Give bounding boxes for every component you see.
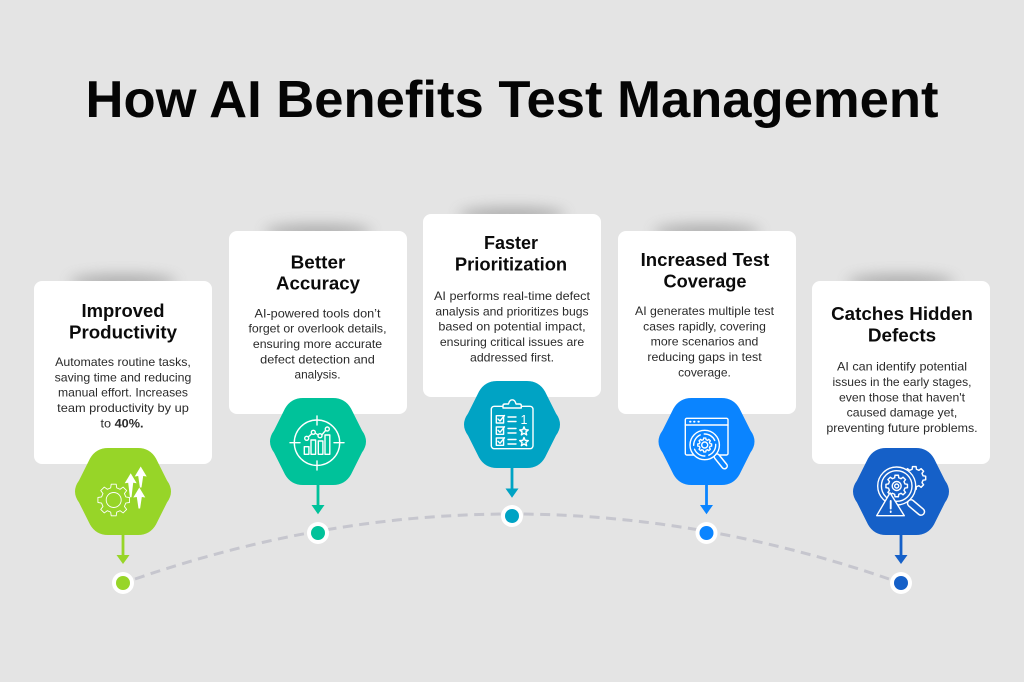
- arrow: green pointer: [116, 534, 130, 564]
- text: increased test coverage description: AI generates multiple test: [635, 305, 775, 318]
- heading: improved productivity: [69, 300, 178, 342]
- marker: cyan dot: [501, 505, 523, 527]
- hexagon: cyan: [464, 381, 560, 468]
- text: better accuracy description: defect detection and: [260, 353, 375, 366]
- text: catches hidden defects description: [826, 361, 978, 435]
- text: improved productivity description: to 40%.: [100, 417, 144, 430]
- text: improved productivity description: saving time and reducing: [55, 371, 191, 384]
- heading: faster prioritization: Prioritization: [455, 253, 567, 274]
- icon: target with bar chart: [290, 416, 344, 470]
- hexagon: blue: [658, 398, 754, 485]
- text: faster prioritization description: addressed first.: [470, 351, 554, 364]
- text: catches hidden defects description: preventing future problems.: [826, 422, 978, 435]
- heading: improved productivity: Productivity: [69, 322, 178, 342]
- heading: increased test coverage: Coverage: [664, 270, 746, 291]
- text: better accuracy description: AI-powered tools don’t: [254, 307, 381, 320]
- heading: catches hidden defects: Catches Hidden: [831, 303, 973, 324]
- icon: magnifier, gears and warning: [877, 467, 926, 516]
- text: catches hidden defects description: caused damage yet,: [847, 407, 957, 420]
- text: improved productivity description: Automates routine tasks,: [55, 356, 191, 369]
- title: How AI Benefits Test Management: [86, 71, 938, 129]
- icon: gear with up arrows: [98, 466, 147, 516]
- text: increased test coverage description: coverage.: [678, 366, 731, 379]
- heading: catches hidden defects: Defects: [868, 324, 936, 345]
- icon: clipboard checklist: [491, 400, 533, 449]
- text: increased test coverage description: reducing gaps in test: [647, 351, 762, 364]
- text: faster prioritization description: analysis and prioritizes bugs: [435, 305, 589, 318]
- text: better accuracy description: analysis.: [294, 369, 340, 382]
- marker: teal dot: [307, 522, 329, 544]
- text: faster prioritization description: based on potential impact,: [438, 321, 586, 334]
- text: increased test coverage description: [635, 305, 775, 379]
- arrow: teal pointer: [312, 484, 324, 514]
- marker: green dot: [112, 572, 134, 594]
- heading: better accuracy: [276, 251, 361, 293]
- text: faster prioritization description: [434, 290, 591, 364]
- arrow: blue pointer: [700, 484, 713, 514]
- heading: improved productivity: Improved: [82, 300, 164, 321]
- heading: better accuracy: Accuracy: [276, 272, 361, 293]
- heading: faster prioritization: [455, 232, 567, 274]
- hexagon: green: [75, 448, 171, 535]
- text: improved productivity description: [55, 356, 191, 430]
- dashed arc connector: [135, 514, 889, 579]
- text: catches hidden defects description: AI can identify potential: [837, 361, 967, 374]
- panel: increased test coverage: [618, 225, 796, 414]
- text: increased test coverage description: more scenarios and: [651, 336, 758, 349]
- panel: better accuracy: [229, 225, 407, 414]
- heading: better accuracy: Better: [291, 251, 345, 272]
- text: faster prioritization description: ensuring critical issues are: [440, 336, 584, 349]
- panel: improved productivity: [34, 275, 212, 464]
- heading: faster prioritization: Faster: [484, 232, 538, 253]
- panel: catches hidden defects: [812, 275, 990, 464]
- heading: increased test coverage: Increased Test: [641, 249, 769, 270]
- text: faster prioritization description: AI performs real-time defect: [434, 290, 591, 303]
- heading: increased test coverage: [641, 249, 769, 291]
- heading: catches hidden defects: [831, 303, 973, 345]
- text: improved productivity description: manual effort. Increases: [58, 387, 188, 400]
- icon: browser window with magnifier: [685, 418, 728, 466]
- arrow: cyan pointer: [506, 467, 518, 498]
- text: increased test coverage description: cases rapidly, covering: [643, 320, 766, 333]
- text: better accuracy description: [248, 307, 386, 382]
- arrow: dark blue pointer: [894, 534, 908, 564]
- text: catches hidden defects description: even those that haven't: [839, 391, 966, 404]
- icon text: priority number: 1: [521, 413, 528, 427]
- text: better accuracy description: forget or overlook details,: [248, 323, 386, 336]
- hexagon: dark blue: [853, 448, 949, 535]
- text: better accuracy description: ensuring more accurate: [253, 338, 382, 351]
- hexagon: teal: [270, 398, 366, 485]
- text: improved productivity description: team productivity by up: [57, 402, 189, 415]
- panel: faster prioritization: [423, 208, 601, 397]
- marker: blue dot: [696, 522, 718, 544]
- marker: dark blue dot: [890, 572, 912, 594]
- text: catches hidden defects description: issues in the early stages,: [832, 376, 972, 389]
